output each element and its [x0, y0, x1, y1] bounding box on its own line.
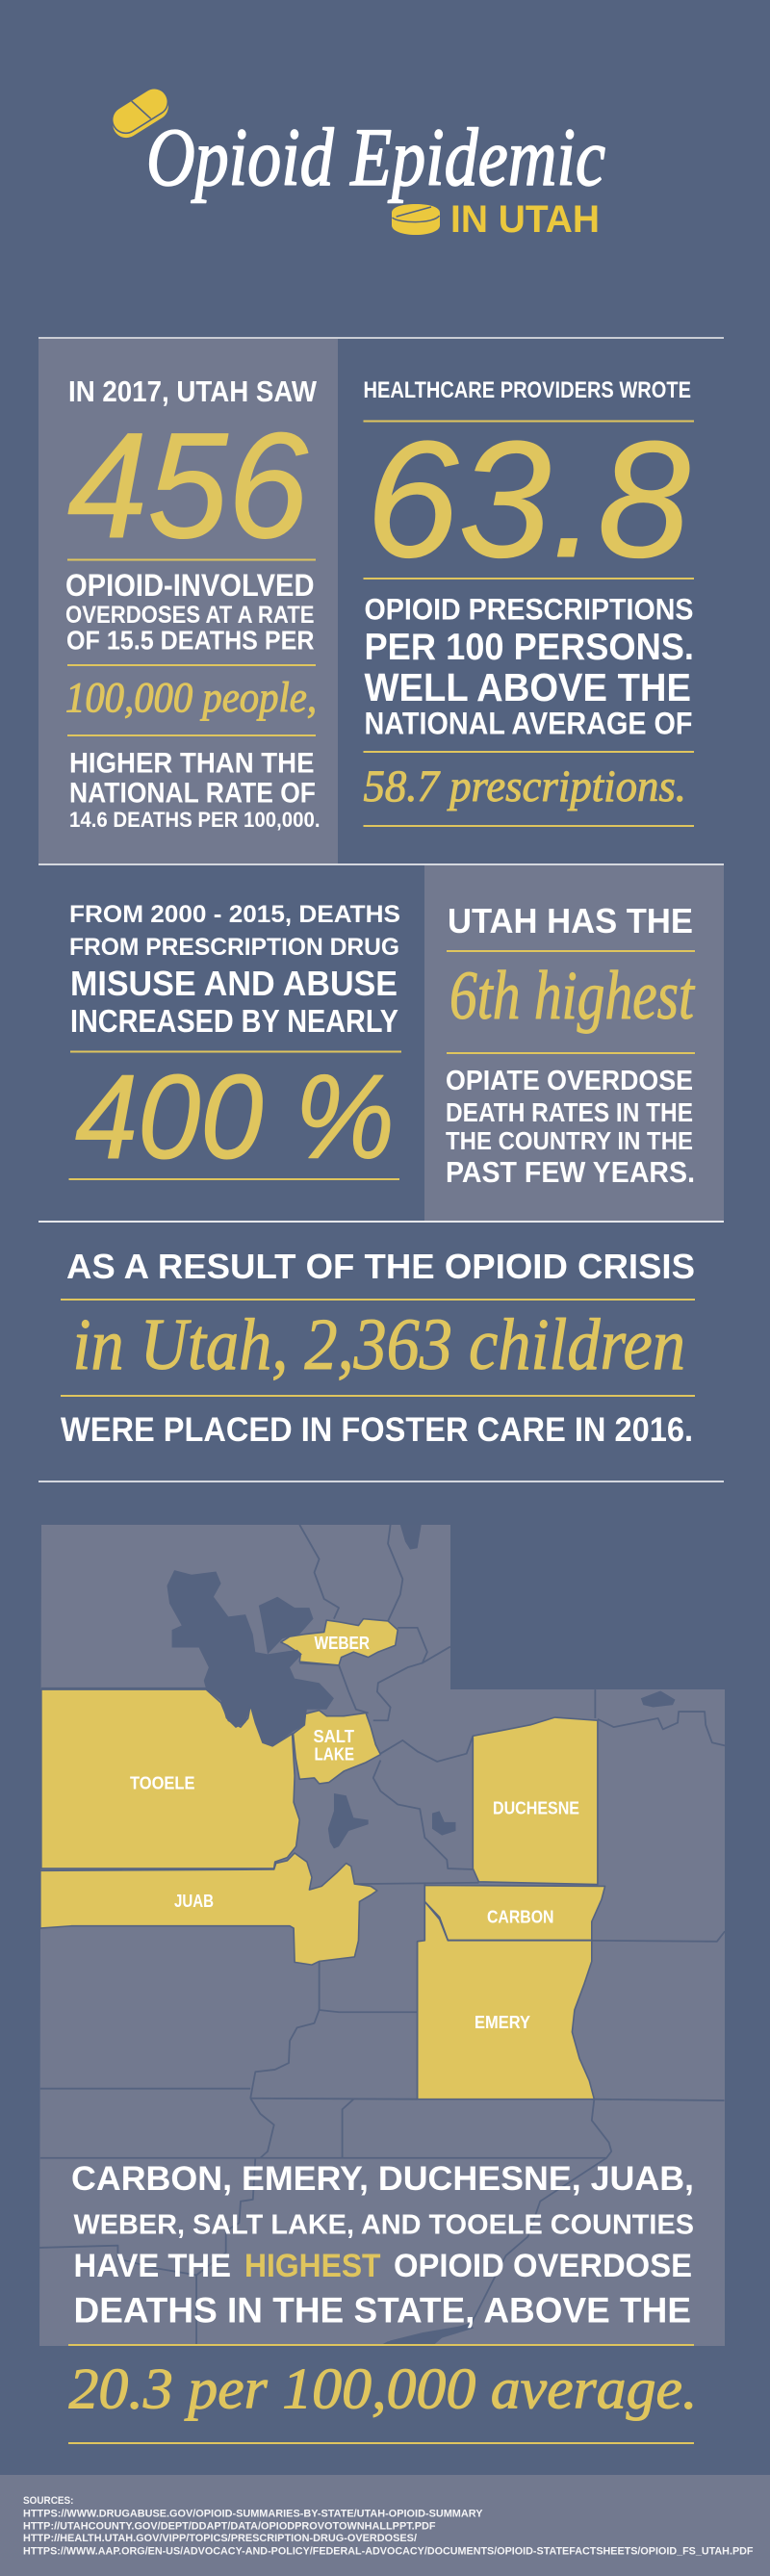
county labels: WEBER	[314, 1634, 370, 1653]
county: Salt Lake	[294, 1711, 380, 1784]
panel: 2017 deaths	[38, 339, 338, 863]
subtitle: IN UTAH	[450, 198, 600, 241]
panel: sixth highest	[424, 865, 724, 1221]
county labels: LAKE	[314, 1744, 354, 1764]
lake: Utah Lake	[328, 1793, 369, 1848]
county labels: TOOELE	[130, 1773, 194, 1792]
misuse description: MISUSE AND ABUSE	[70, 964, 398, 1003]
big number 63.8: 63.8	[366, 407, 690, 592]
misuse description: FROM PRESCRIPTION DRUG	[69, 934, 399, 961]
misuse description: INCREASED BY NEARLY	[70, 1004, 398, 1040]
counties text block	[71, 2160, 694, 2331]
misuse description: FROM 2000 - 2015, DEATHS	[69, 901, 400, 928]
national rate comparison	[69, 747, 320, 832]
icon: capsule pill	[107, 83, 173, 142]
death rate description	[446, 1066, 695, 1189]
prescription description: OPIOID PRESCRIPTIONS	[364, 593, 693, 626]
script: 58.7 prescriptions: 58.7 prescriptions.	[364, 761, 686, 811]
text: foster care: WERE PLACED IN FOSTER CARE IN 2016.	[61, 1411, 693, 1449]
county: Emery	[418, 1901, 594, 2099]
counties text block: WEBER, SALT LAKE, AND TOOELE COUNTIES	[73, 2210, 694, 2241]
sources footer: SOURCES:	[23, 2495, 73, 2507]
sources footer: HTTPS://WWW.AAP.ORG/EN-US/ADVOCACY-AND-POLICY/FEDERAL-ADVOCACY/DOCUMENTS/OPIOID-STATEFACTSHEETS/OPIOID_FS_UTAH.PDF	[23, 2545, 754, 2557]
lake: Great Salt Lake	[167, 1570, 334, 1746]
icon: round tablet	[392, 204, 440, 235]
script: children count: in Utah, 2,363 children	[73, 1304, 685, 1385]
intro text: HEALTHCARE PROVIDERS WROTE	[364, 377, 691, 403]
county: Juab	[40, 1853, 377, 1965]
counties text block: CARBON, EMERY, DUCHESNE, JUAB,	[71, 2160, 694, 2198]
county labels: CARBON	[487, 1908, 554, 1927]
county labels: SALT	[314, 1727, 354, 1746]
lake: Lake Powell	[380, 2325, 474, 2346]
misuse description	[69, 901, 400, 1040]
counties text block: DEATHS IN THE STATE, ABOVE THE	[73, 2291, 691, 2331]
county: Weber	[281, 1619, 398, 1665]
sources footer: HTTPS://WWW.DRUGABUSE.GOV/OPIOID-SUMMARIES-BY-STATE/UTAH-OPIOID-SUMMARY	[23, 2508, 483, 2519]
prescription description: NATIONAL AVERAGE OF	[364, 707, 693, 741]
script: 6th highest: 6th highest	[449, 957, 696, 1034]
sources footer: HTTP://UTAHCOUNTY.GOV/DEPT/DDAPT/DATA/OPIODPROVOTOWNHALLPPT.PDF	[23, 2520, 436, 2532]
death rate description: OPIATE OVERDOSE	[446, 1066, 693, 1096]
overdose description: OF 15.5 DEATHS PER	[66, 626, 315, 655]
overdose description: OVERDOSES AT A RATE	[65, 603, 314, 629]
death rate description: PAST FEW YEARS.	[446, 1156, 695, 1189]
overdose description	[65, 568, 315, 655]
national rate comparison: HIGHER THAN THE	[69, 747, 314, 780]
death rate description: THE COUNTRY IN THE	[446, 1126, 693, 1155]
panel: foster care	[61, 1247, 695, 1449]
national rate comparison: 14.6 DEATHS PER 100,000.	[69, 808, 320, 832]
county: Duchesne	[473, 1717, 598, 1885]
state outline	[39, 1525, 725, 2346]
prescription description	[364, 593, 694, 741]
county labels: JUAB	[174, 1892, 214, 1911]
counties text block: OPIOID OVERDOSE	[394, 2248, 692, 2284]
title text: Opioid Epidemic	[146, 111, 605, 203]
lake: north arm	[259, 1597, 314, 1654]
lake: Bear Lake	[400, 1525, 422, 1550]
county: Tooele	[41, 1689, 299, 1868]
national rate comparison: NATIONAL RATE OF	[69, 778, 316, 809]
sources footer	[0, 2475, 770, 2576]
counties text block: HAVE THE	[73, 2248, 231, 2284]
sources footer: HTTP://HEALTH.UTAH.GOV/VIPP/TOPICS/PRESCRIPTION-DRUG-OVERDOSES/	[23, 2533, 417, 2544]
panel: prescriptions	[364, 377, 694, 827]
death rate description: DEATH RATES IN THE	[446, 1097, 693, 1127]
prescription description: WELL ABOVE THE	[364, 665, 691, 709]
script: 20.3 per 100,000 average: 20.3 per 100,000 average.	[69, 2357, 697, 2421]
counties text block: HIGHEST	[244, 2248, 381, 2284]
title block	[107, 83, 605, 241]
lake: Flaming Gorge	[641, 1690, 676, 1707]
heading: UTAH HAS THE	[448, 901, 693, 940]
county: Carbon	[424, 1885, 605, 1940]
big number 456: 456	[67, 402, 308, 570]
county labels: DUCHESNE	[493, 1798, 579, 1817]
lake: Strawberry Reservoir	[432, 1811, 455, 1836]
intro text: IN 2017, UTAH SAW	[68, 375, 317, 408]
panel: misuse and abuse increase	[69, 901, 401, 1184]
text: opioid crisis: AS A RESULT OF THE OPIOID CRISIS	[66, 1247, 695, 1286]
map of Utah counties	[39, 1525, 725, 2346]
script: 100,000 people: 100,000 people,	[65, 674, 317, 721]
county labels	[130, 1634, 579, 2032]
county labels: EMERY	[475, 2013, 530, 2032]
overdose description: OPIOID-INVOLVED	[65, 568, 314, 603]
prescription description: PER 100 PERSONS.	[364, 627, 694, 668]
big number 400 percent: 400 %	[75, 1051, 395, 1184]
